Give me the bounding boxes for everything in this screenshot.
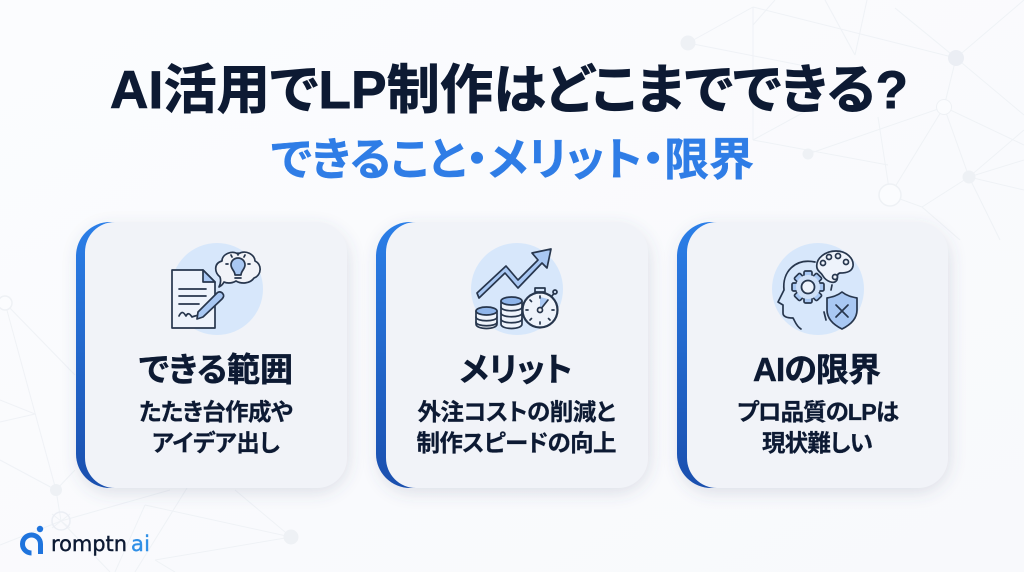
card description: プロ品質のLPは xyxy=(737,399,899,425)
logo: romptn ai: ai xyxy=(131,532,150,556)
card description xyxy=(737,399,899,456)
card description: 制作スピードの向上 xyxy=(416,430,616,456)
icon: head with gear, palette and shield xyxy=(772,243,864,335)
card description: たたき台作成や xyxy=(139,399,293,425)
logo: romptn ai xyxy=(22,526,150,556)
panel: できる範囲 xyxy=(76,222,347,488)
panel: AIの限界 xyxy=(677,222,948,488)
icon: document, pen and idea bubble xyxy=(171,243,263,335)
card description: 現状難しい xyxy=(762,430,873,456)
card description: 外注コストの削減と xyxy=(418,399,616,425)
subtitle: できること・メリット・限界 xyxy=(271,134,754,185)
logo: romptn ai: romptn xyxy=(51,532,127,556)
card heading: メリット xyxy=(460,351,572,388)
card heading: できる範囲 xyxy=(139,351,293,388)
panel: メリット xyxy=(376,222,648,488)
icon: growth arrow, coins and stopwatch xyxy=(471,243,563,335)
card description: アイデア出し xyxy=(152,429,280,456)
card description xyxy=(416,399,616,456)
card heading: AIの限界 xyxy=(753,351,881,388)
title: AI活用でLP制作はどこまでできる? xyxy=(110,61,908,120)
card description xyxy=(139,399,293,456)
